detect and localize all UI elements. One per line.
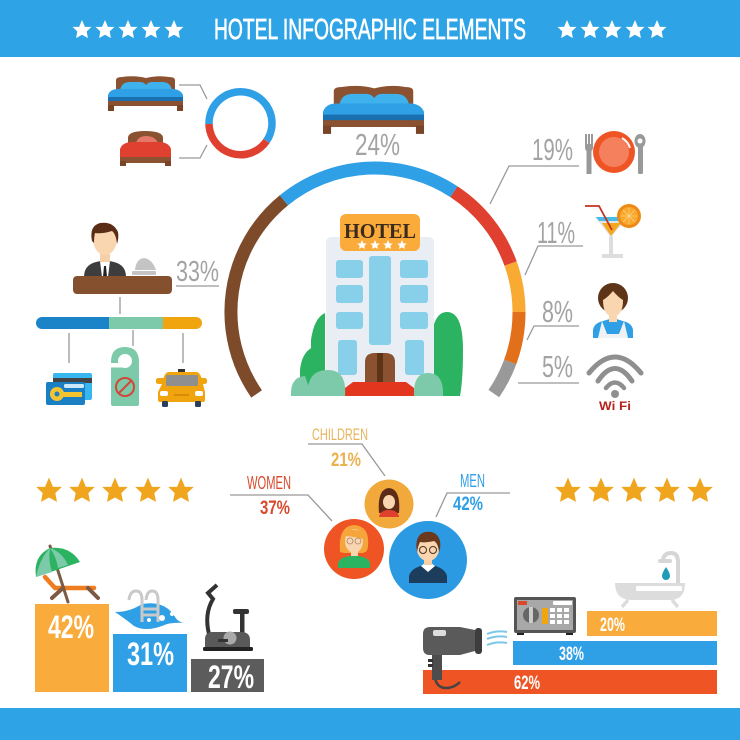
icon: pool [115, 591, 184, 629]
icon: maid [593, 283, 633, 338]
value 38%: 38% [559, 644, 584, 665]
wifi label: Wi Fi [599, 399, 631, 413]
rating stars left [36, 478, 194, 502]
callout lines [230, 444, 510, 521]
icon: plate and cutlery [585, 131, 646, 174]
icon: woman [324, 519, 384, 579]
icon: wifi [589, 357, 641, 398]
panel: room equipment bars [423, 553, 717, 694]
ring chart [209, 92, 272, 155]
icon: child [364, 480, 414, 528]
label 19%: 19% [532, 132, 573, 167]
tree connectors [69, 286, 219, 363]
value 31%: 31% [127, 636, 174, 672]
icon: cocktail [585, 204, 641, 258]
women label: WOMEN [247, 473, 291, 493]
label 24%: 24% [355, 127, 400, 162]
icon: taxi [156, 369, 207, 407]
big bed icon [323, 86, 424, 134]
panel: guests [230, 425, 510, 599]
value 27%: 27% [208, 659, 254, 695]
icon: door hanger [110, 347, 139, 406]
footer band [0, 708, 740, 740]
women value: 37% [260, 498, 290, 519]
icon: bathtub [615, 553, 685, 607]
bar blue [113, 634, 187, 692]
label 8%: 8% [542, 294, 573, 329]
rating stars right [555, 478, 713, 502]
children label: CHILDREN [312, 425, 368, 444]
value 20%: 20% [600, 615, 625, 636]
trees [300, 312, 463, 396]
icon: hotel building [291, 214, 463, 396]
value 62%: 62% [514, 673, 540, 694]
panel: leisure bars [35, 546, 264, 695]
icon: double bed [108, 76, 183, 111]
door [365, 353, 395, 382]
bar orange [35, 604, 109, 692]
icon: service bell [132, 258, 156, 275]
icon: hair dryer [423, 627, 507, 688]
icon: receptionist [84, 223, 126, 277]
sign [340, 214, 420, 251]
bar blue [513, 641, 717, 665]
panel: amenities callouts [490, 131, 646, 413]
sign: HOTEL [344, 219, 416, 243]
building body [326, 237, 434, 395]
header stars left [72, 20, 184, 38]
panel: bed type ring [108, 76, 272, 166]
bushes [291, 370, 443, 396]
bar red [423, 670, 717, 694]
men value: 42% [453, 494, 483, 515]
label 5%: 5% [542, 349, 573, 384]
big arc chart [231, 168, 519, 394]
windows [336, 256, 428, 375]
icon: single bed [120, 131, 171, 166]
value 42%: 42% [48, 609, 94, 645]
callout lines [490, 166, 583, 383]
icon: man [389, 521, 467, 599]
icon: exercise bike [203, 585, 253, 651]
segmented bar [36, 317, 202, 329]
bar orange [587, 611, 717, 636]
title: HOTEL INFOGRAPHIC ELEMENTS [214, 14, 526, 46]
bar gray [191, 659, 264, 692]
icon: safe [514, 597, 576, 635]
label 11%: 11% [537, 215, 575, 250]
label 33%: 33% [176, 256, 219, 288]
icon: beach umbrella and lounger [36, 546, 98, 602]
carpet [345, 382, 414, 396]
icon: key card [46, 373, 92, 405]
children value: 21% [331, 450, 361, 471]
callout lines [179, 85, 207, 158]
panel: reception [36, 223, 219, 407]
header band [0, 0, 740, 57]
men label: MEN [460, 471, 485, 491]
header stars right [558, 20, 666, 38]
desk [73, 276, 172, 294]
